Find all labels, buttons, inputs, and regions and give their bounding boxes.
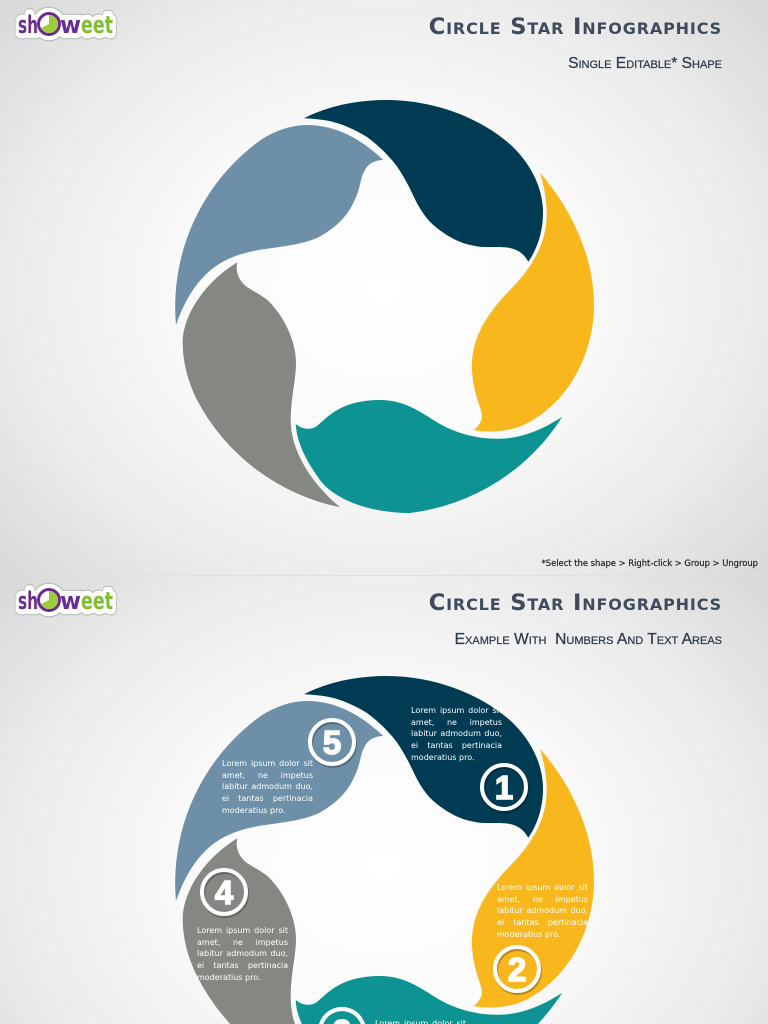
title: Circle Star Infographics — [429, 590, 722, 616]
logo: Showeet: w — [60, 11, 81, 39]
segment: teal — [296, 400, 562, 513]
title: Circle Star Infographics — [429, 14, 722, 40]
number badge 4: 4 — [215, 874, 234, 911]
number badge 1: 1 — [495, 769, 513, 806]
text block 5: Lorem ipsum dolor sit — [222, 759, 313, 768]
text block 4: moderatius pro. — [197, 973, 261, 982]
number badge 5: 5 — [323, 724, 341, 761]
logo: Showeet — [14, 6, 118, 42]
logo: Showeet: eet — [81, 11, 113, 39]
segment 1: dark blue — [304, 676, 543, 838]
text block 2: labitur admodum duo, — [497, 906, 588, 915]
text block 1 — [411, 706, 502, 762]
text block 5: amet, ne impetus — [222, 771, 313, 780]
text block 4: Lorem ipsum dolor sit — [197, 926, 288, 935]
text block 1: labitur admodum duo, — [411, 729, 502, 738]
subtitle: Example With Numbers And Text Areas — [455, 631, 722, 648]
footnote: *Select the shape > Right-click > Group > Ungroup — [542, 558, 758, 568]
subtitle: Single Editable* Shape — [568, 55, 722, 72]
logo: Showeet: sh — [18, 11, 38, 39]
text block 2: moderatius pro. — [497, 930, 561, 939]
segment 4: grey, cut by the frame edge — [183, 838, 296, 1024]
number badge 3 ring, cut by the frame edge — [319, 1007, 365, 1024]
segment: grey — [183, 262, 340, 507]
logo: Showeet: w — [60, 587, 81, 615]
logo: Showeet: w — [60, 587, 81, 615]
panel: slide 2, example with numbers and text areas — [0, 576, 768, 1024]
number badge 4 — [202, 870, 247, 916]
segment 2: yellow — [472, 749, 594, 1007]
logo: Showeet: w — [60, 587, 81, 615]
text block 4: ei tantas pertinacia — [197, 961, 288, 970]
text block 2 — [497, 883, 588, 939]
text block 2: ei tantas pertinacia — [497, 918, 588, 927]
number badge 1 — [482, 765, 527, 811]
text block 1: amet, ne impetus — [411, 718, 502, 727]
logo: Showeet: eet — [81, 587, 113, 615]
chart: circle star of five shapes — [175, 100, 594, 513]
segment: steel blue — [175, 125, 383, 325]
segment 3: teal, cut by the frame edge — [296, 976, 562, 1024]
text block 4: labitur admodum duo, — [197, 949, 288, 958]
text block 2: amet, ne impetus — [497, 895, 588, 904]
logo: Showeet: w — [60, 11, 81, 39]
text block 1: Lorem ipsum dolor sit — [411, 706, 502, 715]
segment: yellow — [472, 173, 594, 431]
logo: Showeet: eet — [81, 587, 113, 615]
logo: Showeet: w — [60, 11, 81, 39]
number badge 5 — [310, 720, 355, 766]
number badge 2: 2 — [508, 951, 526, 988]
logo: Showeet: eet — [81, 11, 113, 39]
logo: Showeet: sh — [18, 11, 38, 39]
text block 4 — [197, 926, 288, 982]
segment 5: steel blue — [175, 701, 383, 901]
segment: dark blue — [304, 100, 543, 262]
logo: Showeet: eet — [81, 587, 113, 615]
logo: Showeet — [14, 582, 118, 618]
logo: Showeet: sh — [18, 587, 38, 615]
text block 5: labitur admodum duo, — [222, 782, 313, 791]
text block 4: amet, ne impetus — [197, 938, 288, 947]
number badge 2 — [495, 947, 540, 993]
text block 1: ei tantas pertinacia — [411, 741, 502, 750]
text block 5: ei tantas pertinacia — [222, 794, 313, 803]
panel: slide 1, single editable shape — [0, 0, 768, 575]
chart: numbered circle star — [175, 676, 594, 1024]
logo: Showeet: sh — [18, 11, 38, 39]
text block 5 — [222, 759, 313, 815]
text block 1: moderatius pro. — [411, 753, 475, 762]
logo: Showeet: eet — [81, 11, 113, 39]
text block 2: Lorem ipsum dolor sit — [497, 883, 588, 892]
logo: Showeet: sh — [18, 587, 38, 615]
text block 5: moderatius pro. — [222, 806, 286, 815]
logo: Showeet: sh — [18, 587, 38, 615]
